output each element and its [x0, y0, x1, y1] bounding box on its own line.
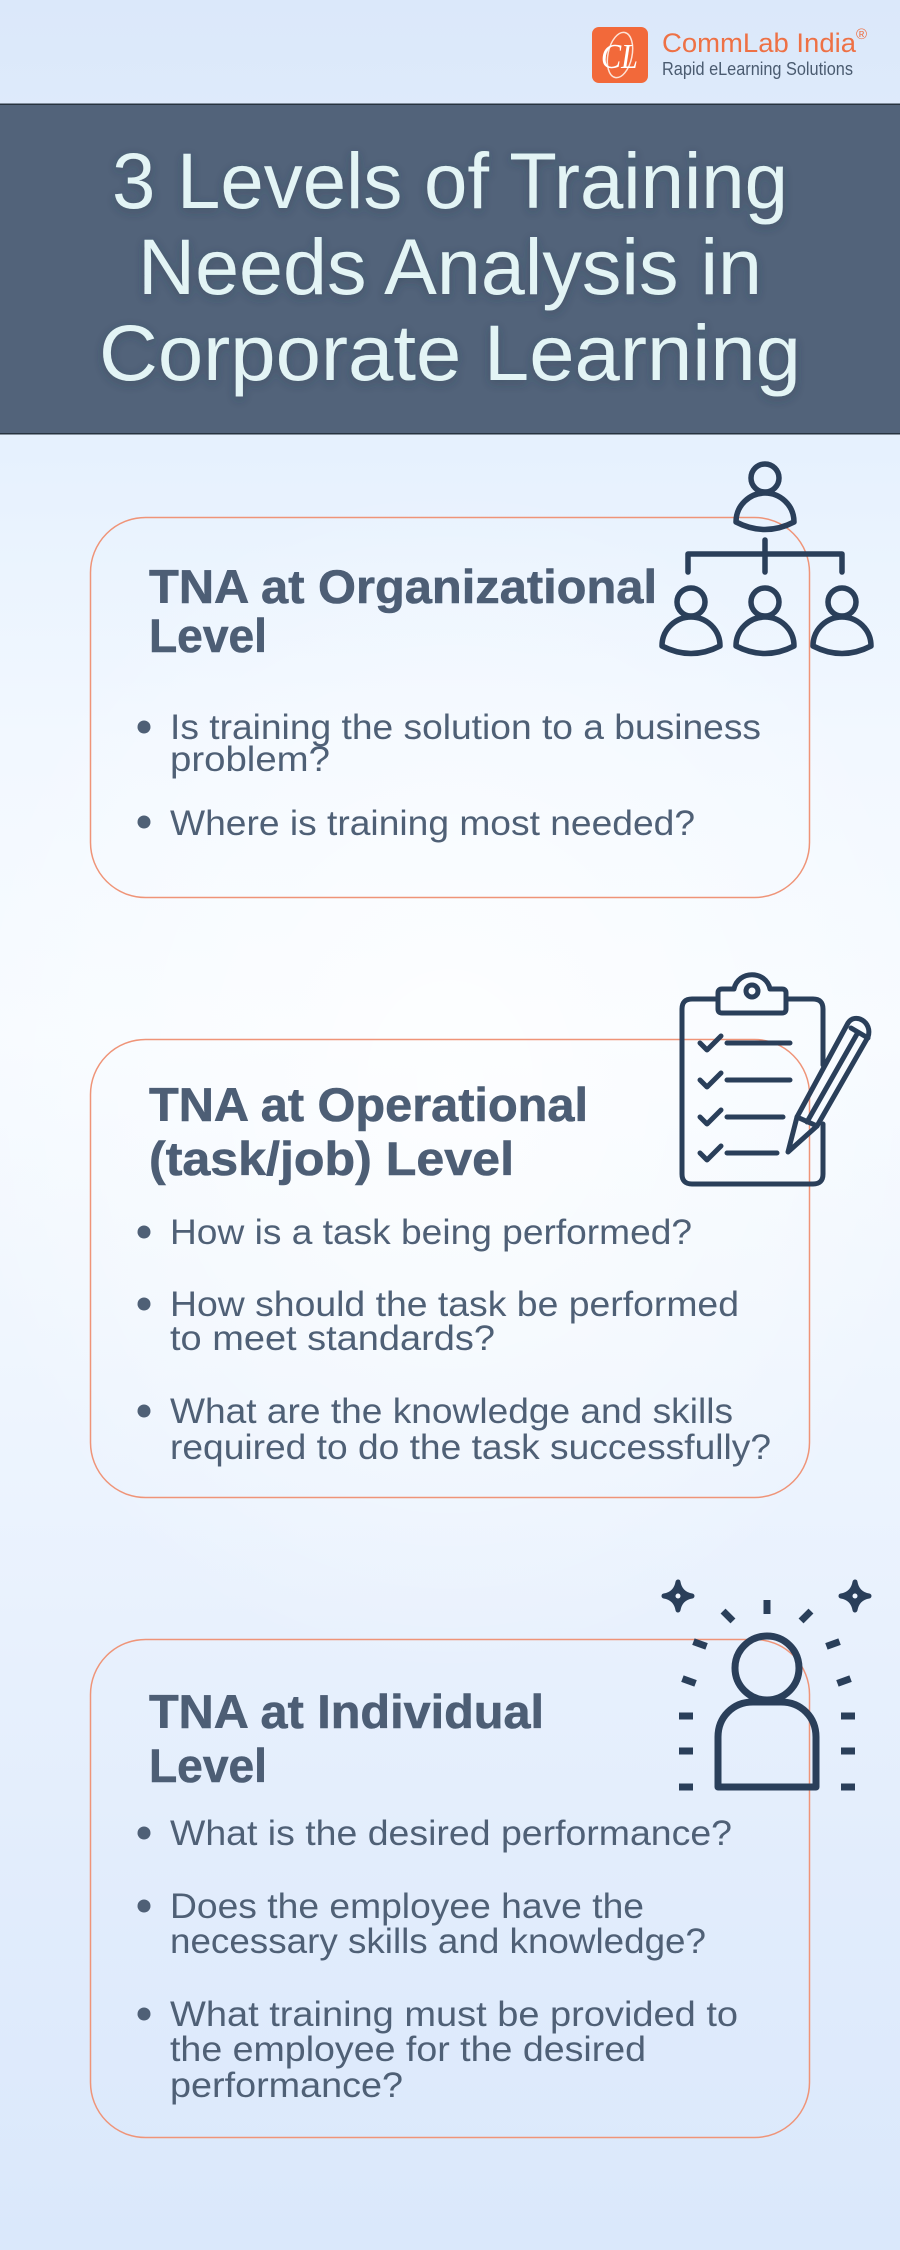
heading: organizational: TNA at Organizational — [149, 560, 657, 613]
bullet list: operational: to meet standards? — [170, 1319, 495, 1358]
heading: individual — [149, 1685, 544, 1792]
bullet list: individual: What is the desired performance? — [170, 1814, 732, 1853]
logo tagline: Rapid eLearning Solutions — [662, 59, 853, 79]
bullet list: operational: What are the knowledge and skills — [170, 1392, 733, 1431]
logo name: CommLab India — [662, 28, 857, 58]
bullet list: organizational: problem? — [170, 740, 330, 779]
bullet list: individual: What training must be provided to — [170, 1995, 738, 2034]
bullet list: operational: required to do the task successfully? — [170, 1428, 771, 1467]
icon: organization hierarchy — [662, 464, 871, 654]
registered mark: ® — [856, 26, 867, 43]
panel: organizational level — [90, 464, 871, 898]
heading: operational — [149, 1078, 588, 1185]
panel: individual level — [90, 1582, 869, 2138]
panel: operational level — [90, 975, 869, 1498]
logo mark — [592, 27, 648, 83]
bullet list: organizational — [138, 708, 761, 843]
heading: organizational: Level — [149, 609, 267, 662]
title — [99, 136, 801, 397]
bullet list: operational: How should the task be performed — [170, 1285, 739, 1324]
heading: individual: TNA at Individual — [149, 1685, 544, 1738]
heading: individual: Level — [149, 1739, 267, 1792]
bullet list: individual: necessary skills and knowledge? — [170, 1922, 706, 1961]
bullet list: organizational: Where is training most needed? — [170, 804, 695, 843]
logo — [592, 26, 867, 83]
icon: clipboard and pencil — [682, 975, 869, 1184]
title: Corporate Learning — [99, 308, 801, 397]
bullet list: individual: the employee for the desired — [170, 2030, 646, 2069]
bullet list: individual: Does the employee have the — [170, 1887, 644, 1926]
logo mark: CL — [601, 37, 638, 76]
icon: person with sparkles — [664, 1582, 869, 1790]
title: 3 Levels of Training — [112, 136, 788, 225]
bullet list: individual — [138, 1814, 738, 2105]
bullet list: organizational: Is training the solution to a business — [170, 708, 761, 747]
title: Needs Analysis in — [138, 222, 762, 311]
title band — [0, 104, 900, 434]
bullet list: operational: How is a task being performed? — [170, 1213, 692, 1252]
heading: organizational — [149, 560, 657, 662]
heading: operational: (task/job) Level — [149, 1132, 514, 1185]
bullet list: operational — [138, 1213, 771, 1467]
bullet list: individual: performance? — [170, 2066, 403, 2105]
heading: operational: TNA at Operational — [149, 1078, 588, 1131]
